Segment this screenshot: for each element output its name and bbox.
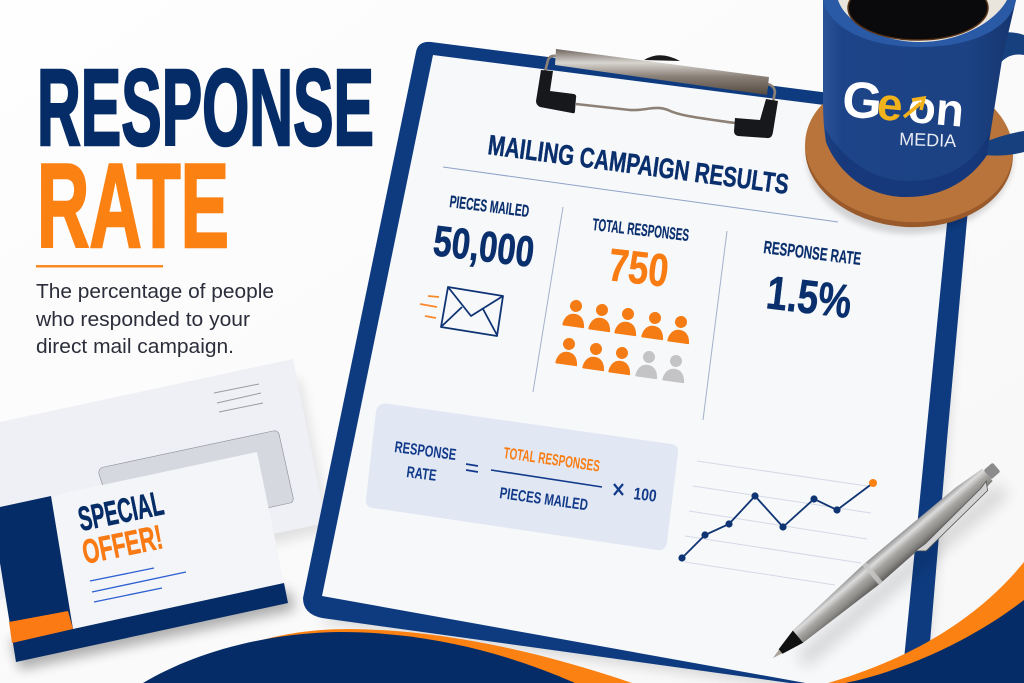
column: total responses: 750 <box>606 238 671 297</box>
clipboard paper <box>322 55 957 683</box>
coaster <box>800 67 1018 234</box>
column divider <box>703 231 727 420</box>
column: response rate <box>763 237 862 328</box>
logo: Geon Media: MEDIA <box>899 129 957 151</box>
pen <box>765 458 1015 679</box>
title: Response Rate: RATE <box>37 139 229 273</box>
bottom left swoosh <box>143 629 632 683</box>
column: total responses: TOTAL RESPONSES <box>592 215 690 245</box>
column: pieces mailed: 50,000 <box>431 217 537 277</box>
icon: envelope <box>441 287 503 336</box>
card headline: SPECIAL <box>75 484 167 539</box>
bottom right swoosh <box>828 562 1024 683</box>
envelope address lines <box>214 384 263 412</box>
mug handle <box>983 32 1024 156</box>
heading divider <box>443 167 838 222</box>
clipboard clip <box>536 49 778 138</box>
card headline: OFFER! <box>79 518 166 572</box>
pen barrel <box>790 465 996 646</box>
description text: The percentage of people <box>36 281 274 303</box>
mug body <box>823 0 1016 197</box>
card headline <box>75 484 167 572</box>
card text lines <box>90 568 186 602</box>
icon: people row 1 <box>562 299 693 344</box>
formula label: RATE <box>405 464 438 485</box>
envelope with window <box>0 359 330 610</box>
column: total responses <box>555 215 693 383</box>
line chart <box>678 461 877 585</box>
column divider <box>533 207 563 392</box>
fraction: TOTAL RESPONSES <box>502 445 601 475</box>
multiply by 100 <box>614 484 658 506</box>
formula panel <box>366 404 678 550</box>
column: response rate: 1.5% <box>764 265 854 328</box>
column: response rate: RESPONSE RATE <box>763 237 862 269</box>
fraction <box>491 445 602 514</box>
logo: Geon Media: G <box>840 70 885 130</box>
multiply by 100: 100 <box>633 484 658 506</box>
clip left grip <box>536 70 576 113</box>
logo: Geon Media <box>840 70 966 151</box>
description text: who responded to your <box>35 309 250 331</box>
title: Response Rate: RESPONSE <box>37 47 374 169</box>
pen clip <box>911 481 995 556</box>
mug rim and coffee <box>823 0 1016 47</box>
coffee mug <box>823 0 1024 197</box>
clip wire <box>545 56 775 123</box>
icon: people row 2 <box>555 337 688 383</box>
formula label: RESPONSE <box>393 439 457 464</box>
logo: Geon Media: eon <box>875 77 966 137</box>
title: Response Rate <box>37 47 374 273</box>
icon: speed lines <box>420 296 439 318</box>
clip bar <box>555 49 769 95</box>
heading: mailing campaign results: MAILING CAMPAIGN RESULTS <box>486 129 791 200</box>
clip right grip <box>734 99 778 138</box>
column: pieces mailed <box>420 192 537 336</box>
special offer card <box>0 452 295 670</box>
equals sign <box>466 464 478 472</box>
title underline <box>36 265 163 268</box>
column: pieces mailed: PIECES MAILED <box>448 192 530 221</box>
description text <box>35 281 274 358</box>
fraction: PIECES MAILED <box>498 485 589 514</box>
clipboard board <box>303 42 978 683</box>
formula label <box>393 439 457 485</box>
description text: direct mail campaign. <box>36 336 234 358</box>
